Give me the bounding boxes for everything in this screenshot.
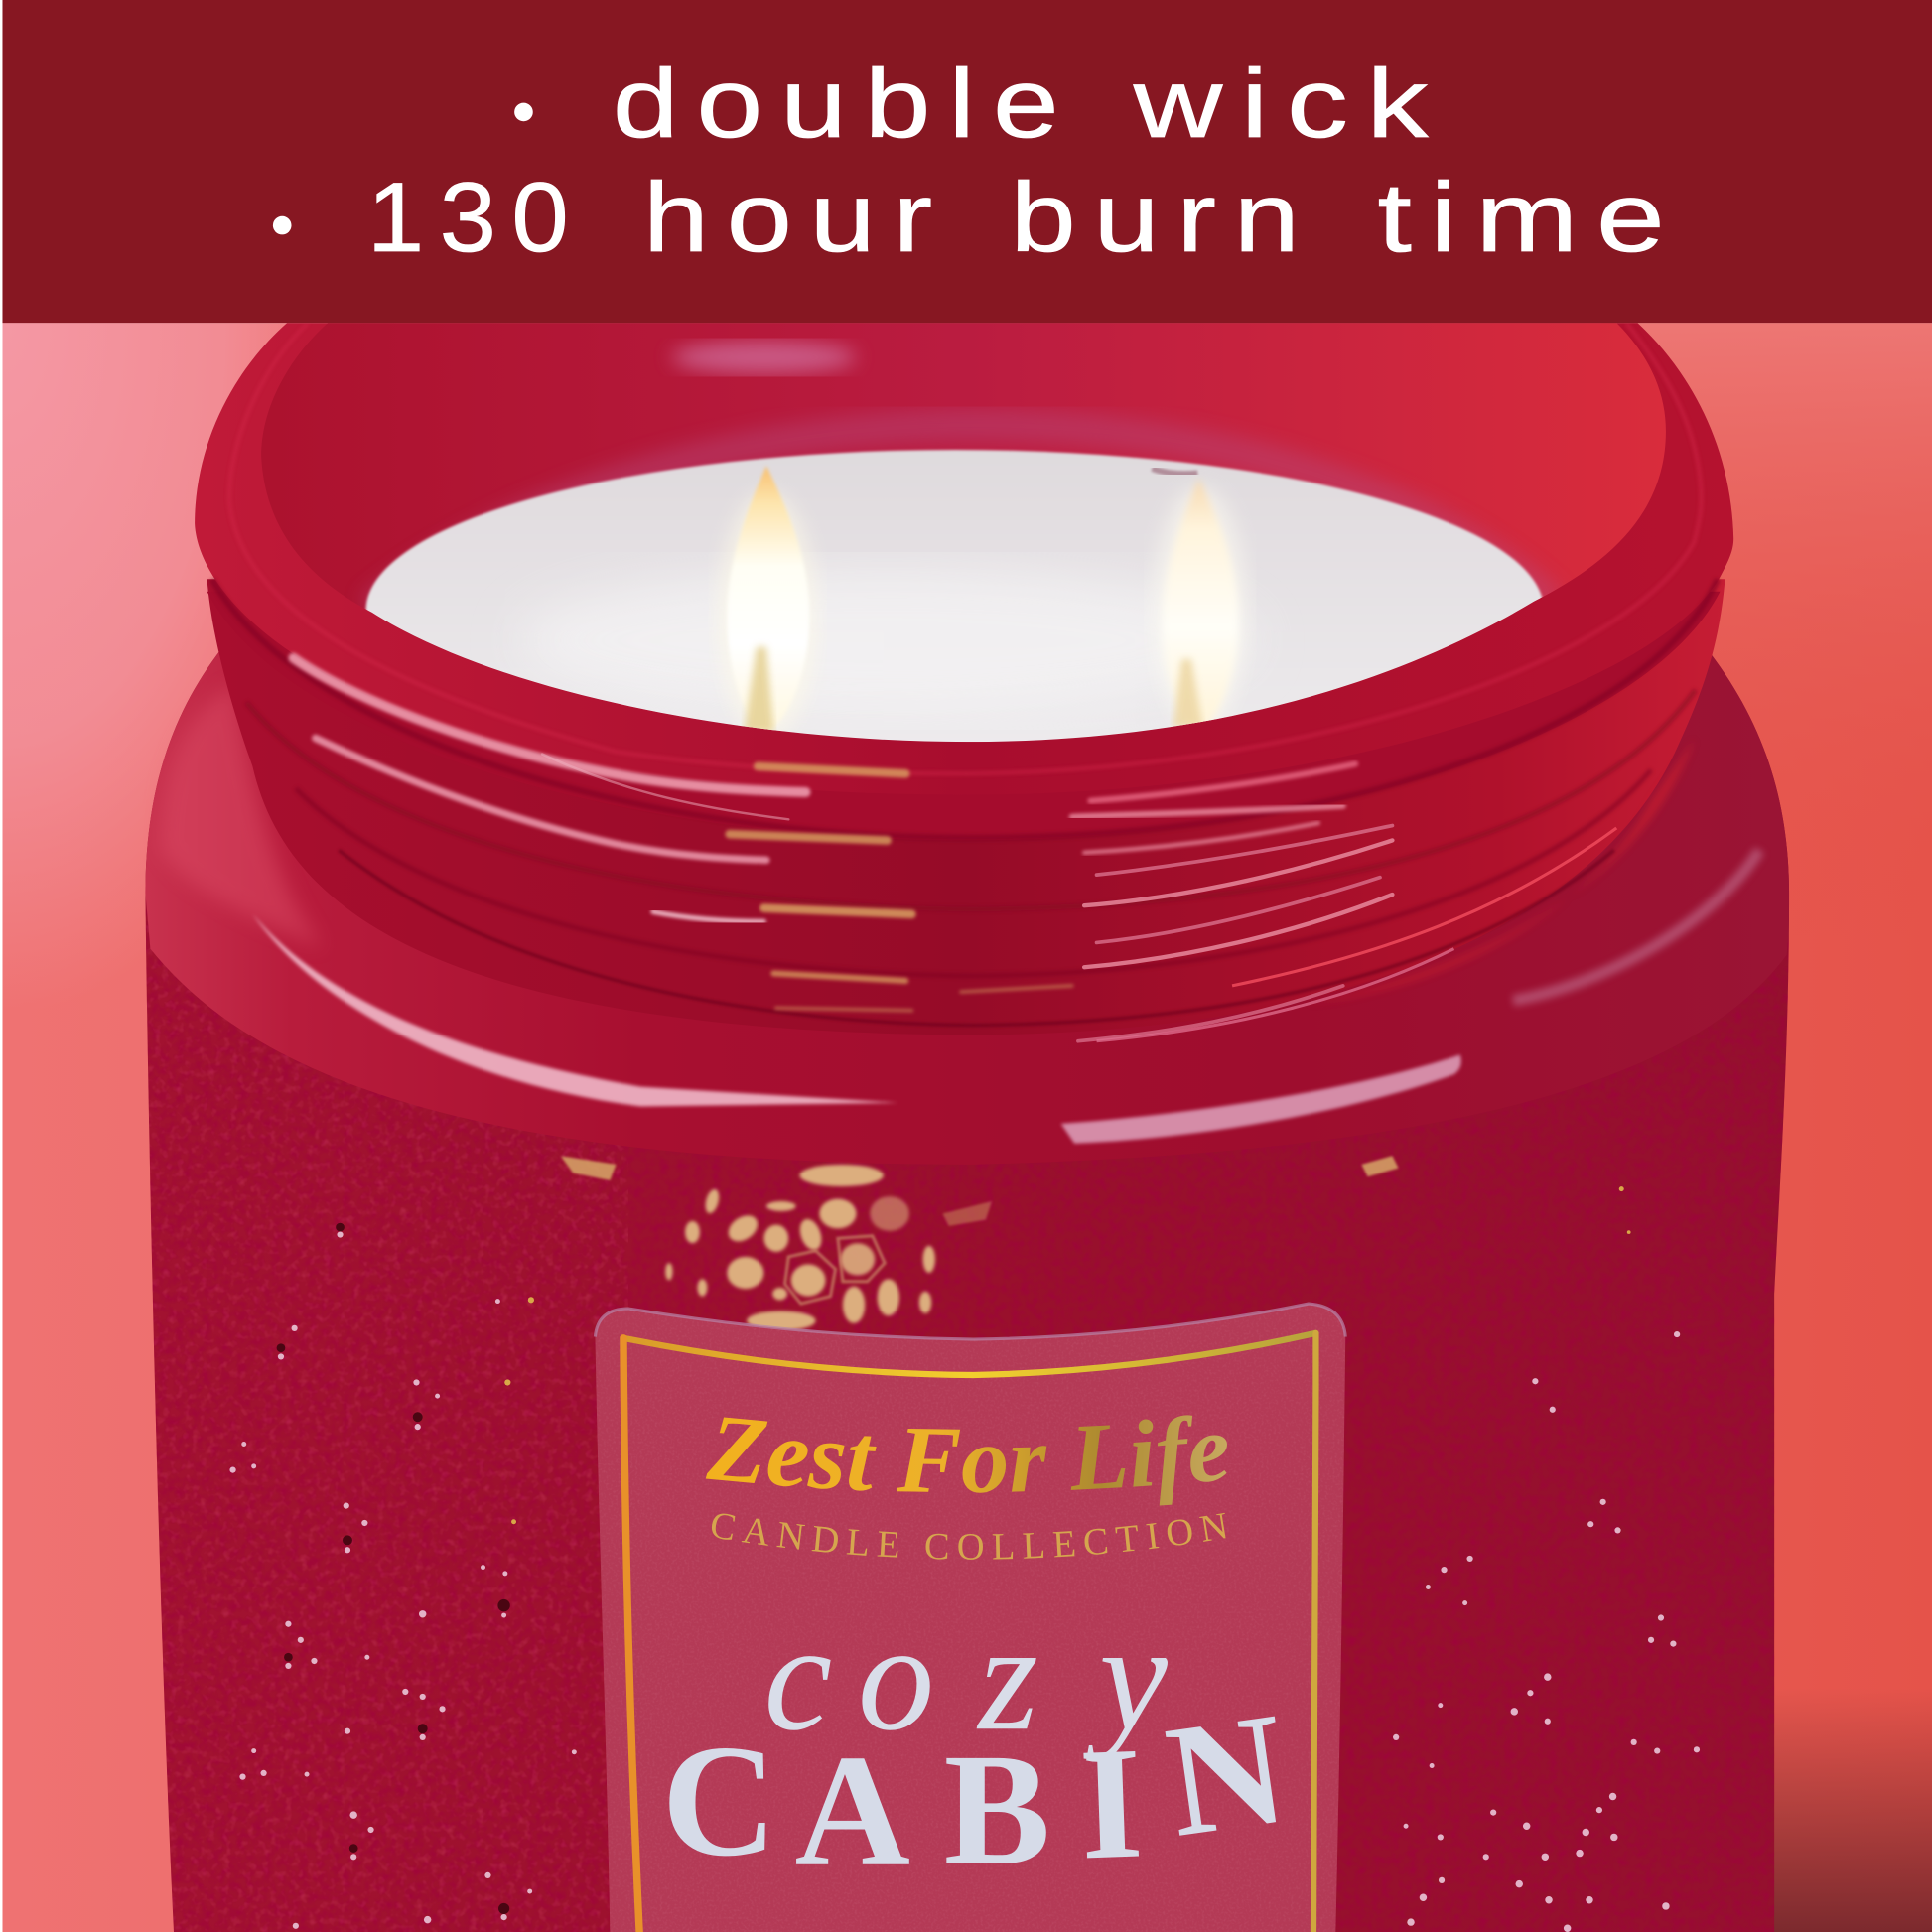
text: double wick: wick xyxy=(1133,49,1447,159)
brand name: Zest For Life xyxy=(705,1415,1227,1505)
product label xyxy=(594,1303,1347,1932)
text: double wick: double xyxy=(613,49,1077,159)
gold reflections xyxy=(730,766,1072,1011)
candle wax xyxy=(366,425,1553,770)
brand subtitle: CANDLE COLLECTION xyxy=(711,1513,1225,1560)
scent name: cozy: cozy xyxy=(763,1591,1168,1762)
bullet: burn time xyxy=(273,216,292,234)
sparkle dots: right xyxy=(1393,1331,1700,1932)
top banner xyxy=(2,0,1932,323)
gold honeycomb emblem xyxy=(561,1156,1399,1330)
label sticker xyxy=(595,1304,1345,1932)
neck red glass side xyxy=(1345,748,1690,997)
text: double wick xyxy=(613,49,1447,159)
upper rim xyxy=(195,323,1733,794)
text: burn time: 130 xyxy=(367,163,584,273)
dark pits and gold flecks xyxy=(277,1186,1631,1914)
text: burn time: burn xyxy=(1011,163,1317,273)
label edge light xyxy=(595,1304,1345,1339)
jar opening xyxy=(261,323,1666,627)
glass highlights xyxy=(293,658,1392,1041)
left shoulder glow xyxy=(163,691,314,942)
neck xyxy=(207,579,1725,1035)
jar shoulder xyxy=(145,640,1789,1165)
candle jar xyxy=(145,323,1789,1932)
body texture xyxy=(136,888,1799,1932)
text: burn time: time xyxy=(1378,163,1683,273)
text: burn time xyxy=(367,163,1683,273)
bullet: double wick xyxy=(514,103,533,121)
gold frame xyxy=(623,1333,1315,1932)
jar body xyxy=(145,640,1789,1932)
sparkle dots: left xyxy=(229,1231,577,1929)
scent name: cabin: CABIN xyxy=(661,1678,1296,1899)
lower thread ring xyxy=(207,592,1721,840)
text: burn time: hour xyxy=(643,163,950,273)
inner reflection xyxy=(671,342,857,373)
shoulder highlights xyxy=(252,850,1759,1144)
flame: right xyxy=(1152,469,1247,733)
label paper grain xyxy=(592,1300,1349,1932)
thread lines xyxy=(211,579,1718,1026)
flame: left xyxy=(719,466,817,740)
rim outer edge light xyxy=(229,323,1702,773)
